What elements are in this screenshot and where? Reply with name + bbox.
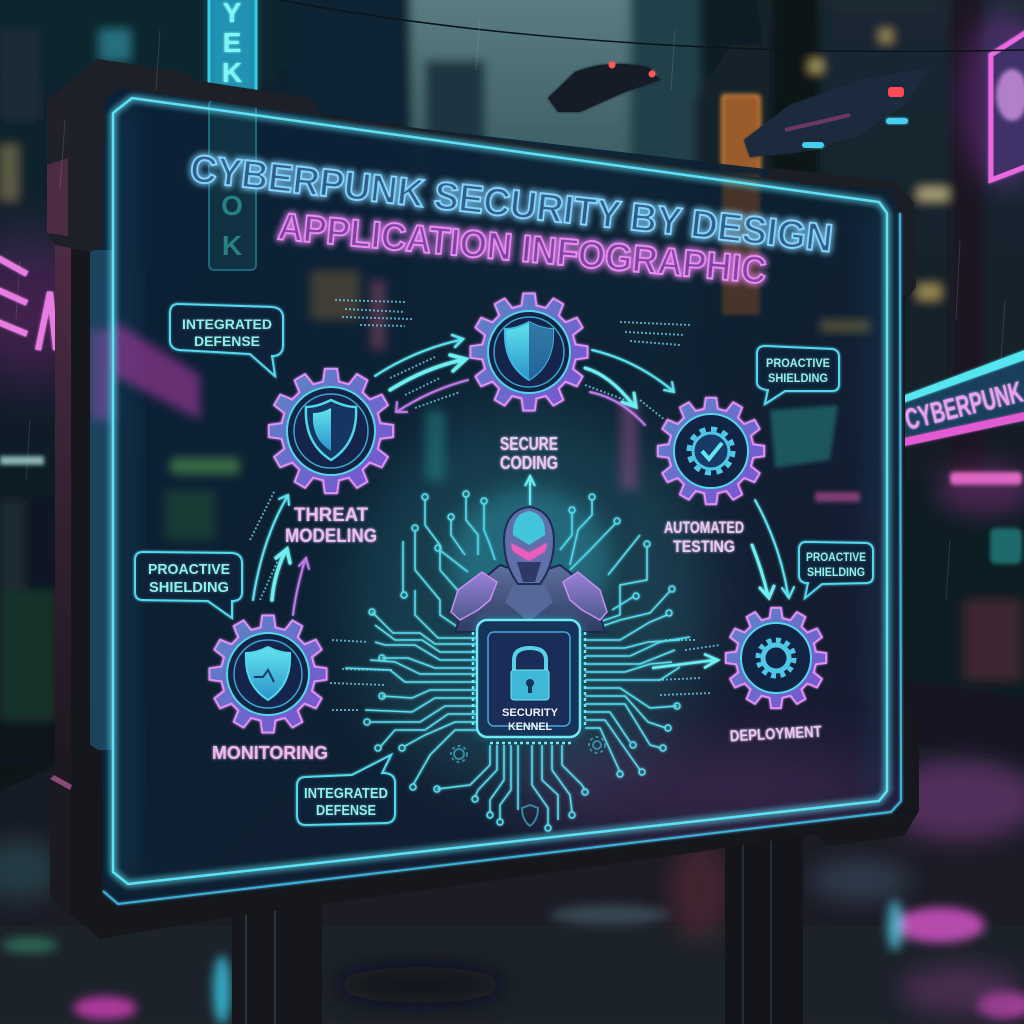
left traces	[345, 590, 477, 785]
callout: proactive shielding left: PROACTIVE	[148, 561, 230, 578]
board glass panel	[90, 87, 901, 904]
rain	[16, 20, 1005, 600]
lower traces	[434, 745, 588, 831]
through-glass cyan sign	[209, 100, 256, 270]
label: secure coding: SECURE	[500, 434, 558, 454]
sign: left pink neon	[0, 235, 110, 385]
arrows: threat modeling to secure coding	[375, 335, 468, 412]
flying cars	[280, 0, 1024, 157]
shoulder right	[563, 572, 607, 620]
frame corner: top right	[761, 168, 916, 300]
callout: proactive shielding left: SHIELDING	[149, 579, 229, 596]
title	[188, 147, 835, 292]
shoulder left	[451, 572, 497, 620]
sign: vertical cyan neon: K	[222, 57, 242, 88]
helmet	[504, 507, 554, 584]
upper traces	[401, 491, 650, 632]
frame top edge	[323, 117, 761, 180]
circuit traces	[345, 491, 690, 831]
board glass panel: O	[221, 190, 243, 221]
small cog icons near chip	[451, 737, 605, 826]
sign: purple neon panel	[960, 10, 1024, 190]
callout: proactive shielding top right: SHIELDING	[768, 371, 828, 385]
label: monitoring: MONITORING	[212, 743, 328, 763]
label: deployment: DEPLOYMENT	[729, 724, 822, 745]
label: threat modeling: THREAT	[294, 505, 368, 526]
callout: integrated defense bottom	[297, 755, 395, 825]
icon: padlock	[511, 648, 549, 700]
chip pins	[473, 632, 585, 743]
gear: automated testing	[658, 398, 764, 504]
arrow: robot to secure coding	[525, 476, 535, 505]
callout: integrated defense bottom: INTEGRATED	[304, 786, 388, 802]
callout: proactive shielding lower right: PROACTIVE	[806, 550, 866, 564]
chip label: SECURITY	[502, 707, 559, 719]
callout: proactive shielding left	[135, 552, 242, 618]
icon: cog	[763, 645, 789, 671]
gear: monitoring	[209, 615, 327, 733]
frame right edge	[901, 295, 905, 710]
title line 1: CYBERPUNK SECURITY BY DESIGN	[188, 147, 835, 261]
right traces	[585, 586, 690, 777]
neon signs in background	[0, 0, 1024, 564]
icon: shield	[306, 400, 356, 460]
label: automated testing: AUTOMATED	[664, 518, 744, 537]
sign posts	[232, 835, 803, 1024]
board left post	[55, 240, 90, 790]
callout: proactive shielding lower right	[799, 542, 873, 598]
board neon border	[90, 98, 901, 904]
gear: secure coding	[470, 293, 588, 411]
through-glass orange sign	[722, 175, 760, 315]
icon: cog with check	[693, 433, 729, 469]
data micro-text lines	[250, 300, 720, 710]
label: threat modeling line two: MODELING	[285, 526, 377, 547]
callout: proactive shielding top right	[757, 346, 839, 404]
sign: vertical cyan neon: E	[223, 27, 241, 58]
icon: shield	[505, 322, 553, 380]
arrows: secure coding to automated testing	[585, 350, 674, 425]
callout: proactive shielding lower right: SHIELDING	[807, 565, 865, 579]
label: automated testing line two: TESTING	[673, 537, 735, 556]
board glass panel: K	[222, 230, 242, 261]
robot guardian figure	[450, 488, 610, 632]
label: secure coding line two: CODING	[500, 453, 558, 473]
frame corner: top left	[47, 59, 323, 252]
ground reflections	[0, 760, 1024, 1024]
frame corner: bottom	[50, 707, 919, 939]
torso	[455, 565, 605, 632]
sign: vertical cyan neon	[209, 0, 256, 92]
callout: integrated defense top	[170, 304, 283, 376]
gear: deployment	[726, 608, 826, 708]
title line 2: APPLICATION INFOGRAPHIC	[276, 206, 768, 292]
chip: security kernel: KENNEL	[508, 721, 552, 733]
callout: integrated defense top: INTEGRATED	[182, 316, 272, 332]
board frame blocks	[47, 59, 919, 939]
gear: threat modeling	[269, 369, 393, 493]
icon: shield	[246, 647, 290, 700]
visor	[511, 543, 547, 561]
arrows: monitoring to threat modeling	[253, 495, 309, 615]
sign: orange neon	[722, 95, 760, 185]
lit building windows	[100, 30, 130, 60]
arrows: automated testing to deployment	[752, 500, 794, 598]
arrow: chip to deployment	[652, 654, 718, 668]
chip: security kernel	[473, 620, 585, 743]
callout: proactive shielding top right: PROACTIVE	[766, 356, 830, 370]
callout: integrated defense top: DEFENSE	[194, 333, 260, 349]
callout: integrated defense bottom: DEFENSE	[316, 803, 376, 819]
